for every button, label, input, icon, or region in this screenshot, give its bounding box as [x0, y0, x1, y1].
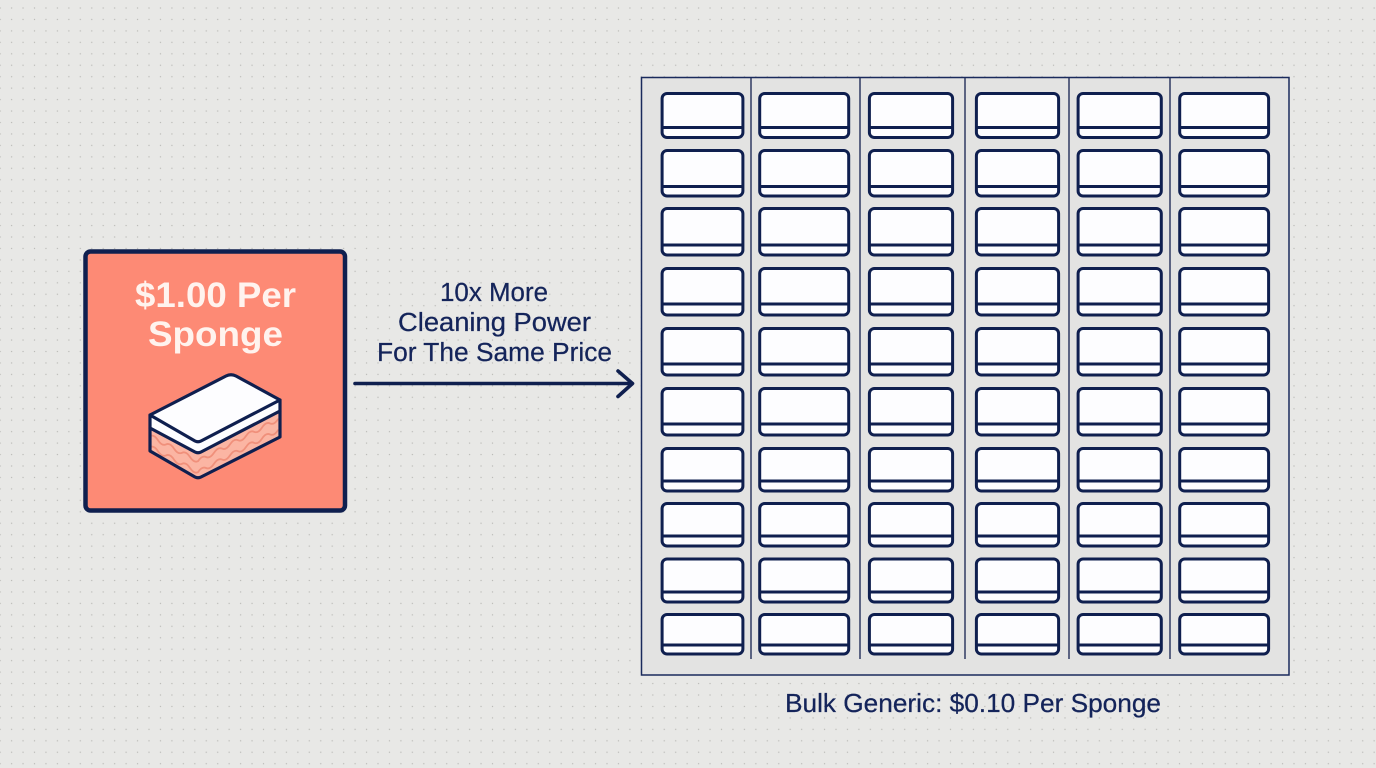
heading: price per sponge: Sponge [148, 315, 283, 354]
row 5 of sponges [662, 328, 1269, 375]
row 8 of sponges [662, 504, 1269, 546]
callout: cleaning power comparison [377, 279, 612, 367]
row 1 of sponges [662, 94, 1269, 138]
heading: price per sponge [135, 276, 296, 354]
callout: cleaning power comparison: For The Same Price [377, 339, 612, 367]
row 7 of sponges [662, 448, 1269, 491]
icon: sponge [150, 375, 280, 484]
row 4 of sponges [662, 268, 1269, 315]
row 10 of sponges [662, 614, 1269, 654]
row 2 of sponges [662, 150, 1269, 196]
callout: cleaning power comparison: 10x More [440, 279, 548, 307]
callout: cleaning power comparison: Cleaning Power [398, 309, 592, 337]
row 3 of sponges [662, 208, 1269, 255]
row 9 of sponges [662, 559, 1269, 602]
caption: bulk generic price: Bulk Generic: $0.10 Per Sponge [785, 688, 1161, 718]
panel: single sponge price [86, 252, 345, 510]
arrow: single sponge to bulk grid [355, 371, 632, 396]
row 6 of sponges [662, 388, 1269, 435]
panel: bulk sponge grid [642, 78, 1289, 675]
heading: price per sponge: $1.00 Per [135, 276, 296, 315]
